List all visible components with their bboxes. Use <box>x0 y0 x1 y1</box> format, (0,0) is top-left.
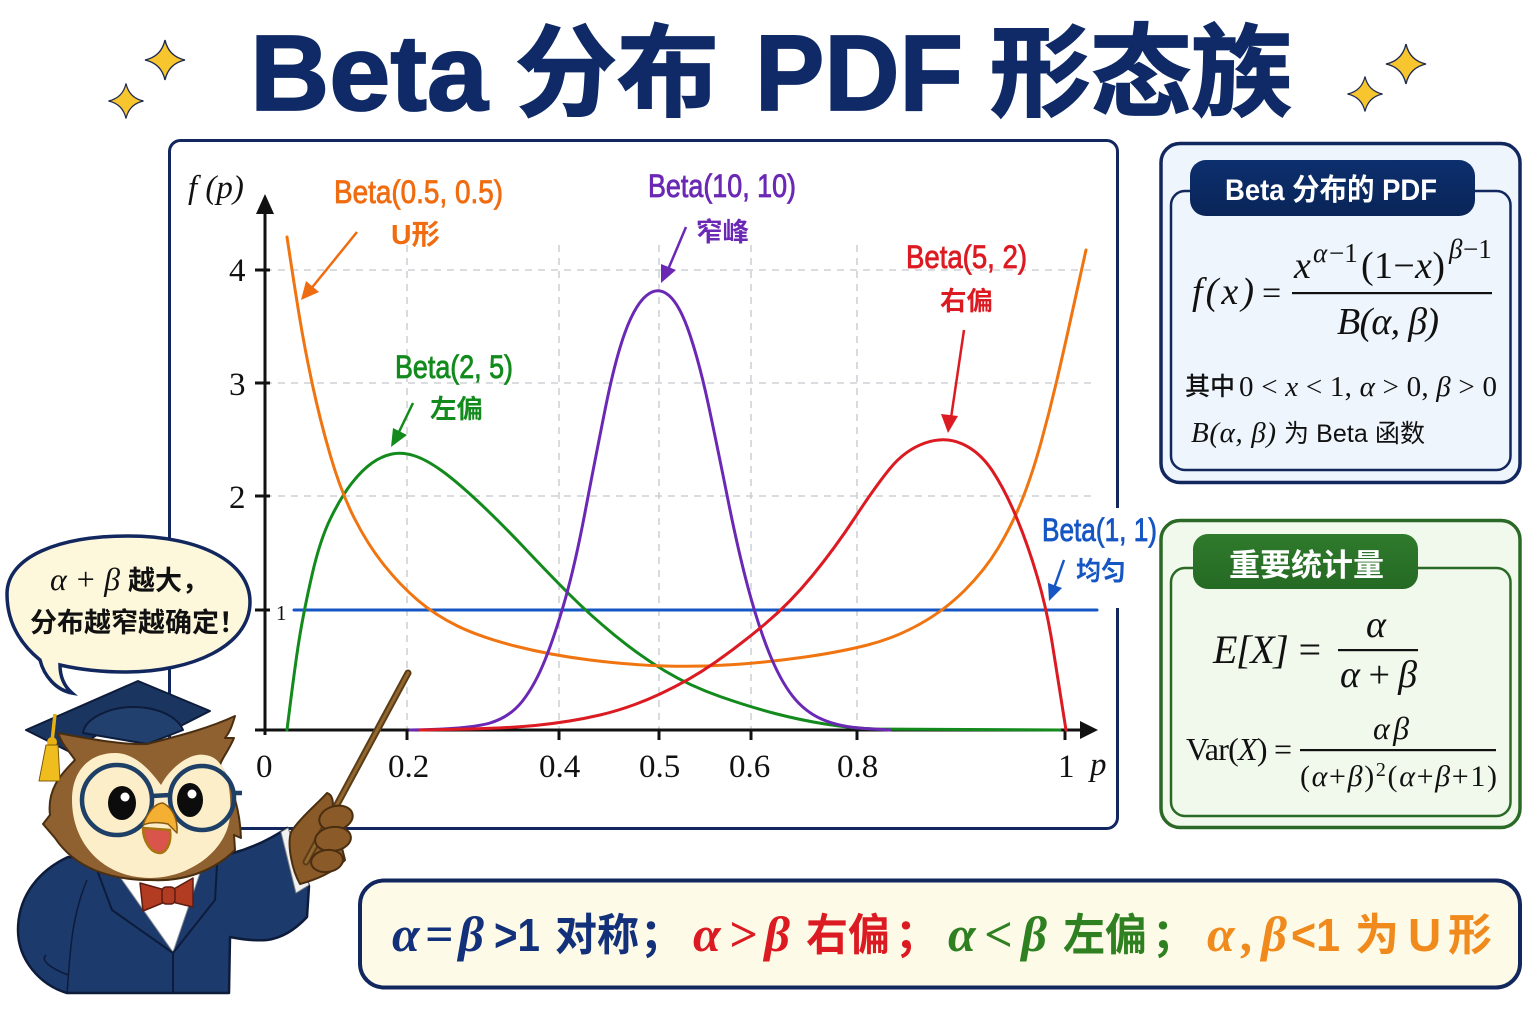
arrow: purple <box>661 227 686 283</box>
callout: speech bubble <box>7 536 250 693</box>
label: Beta(5,2) <box>906 239 1027 316</box>
formula: expectation <box>1212 604 1418 696</box>
axis labels: 0.5 <box>639 749 680 785</box>
owl ears and head <box>43 716 241 880</box>
label: Beta(1,1) <box>1042 508 1158 608</box>
hand palm <box>290 793 345 884</box>
arrow: green <box>391 403 413 447</box>
tassel <box>39 714 60 781</box>
formula: variance: α+β+1) <box>1399 760 1497 793</box>
panel background <box>1161 520 1520 828</box>
hand fingers <box>310 802 356 874</box>
title: 分布 <box>515 18 719 130</box>
axis labels: 0.4 <box>539 749 580 785</box>
rule: symmetric: >1 <box>494 909 540 961</box>
illustration: owl professor <box>18 673 408 993</box>
label: Beta(5,2): Beta(5, 2) <box>906 239 1027 275</box>
label: Beta(1,1): 均匀 <box>1076 556 1126 586</box>
axis labels: 0.6 <box>729 749 770 785</box>
title: Beta <box>250 12 489 133</box>
rule: right skew: 右偏 <box>806 911 890 960</box>
panel: Beta PDF formula <box>1161 144 1520 482</box>
header: 重要统计量 <box>1229 548 1384 583</box>
label: Beta(1,1): Beta(1, 1) <box>1042 512 1157 548</box>
title: 形态族 <box>990 18 1292 130</box>
formula: variance: αβ <box>1373 710 1409 746</box>
callout: speech bubble: 越大， <box>128 566 209 596</box>
eyes <box>108 783 203 820</box>
axis labels: 1 <box>276 601 286 625</box>
header <box>1190 160 1475 216</box>
axes <box>255 194 1098 740</box>
label: Beta(2,5): 左偏 <box>430 394 483 424</box>
note: Beta function <box>1191 417 1425 449</box>
rule: symmetric: ； <box>640 911 684 960</box>
axis labels <box>188 170 1106 785</box>
note: Beta function: 为 Beta 函数 <box>1284 420 1425 448</box>
note: domain: 0 < x < 1, α > 0, β > 0 <box>1239 371 1497 403</box>
cap <box>26 681 210 752</box>
formula: variance: (α+β) <box>1300 760 1374 793</box>
label: Beta(10,10): 窄峰 <box>696 217 749 247</box>
arrow: red <box>941 330 964 433</box>
axis labels: p <box>1088 747 1106 783</box>
arrow: orange <box>301 232 357 300</box>
rule: left skew: α<β <box>948 906 1047 962</box>
axis labels: 3 <box>229 367 246 403</box>
axis labels: 1 <box>1058 749 1074 785</box>
rule: symmetric: α=β <box>392 906 484 962</box>
formula: f(x): f(x) <box>1192 271 1254 313</box>
formula: f(x) <box>1192 234 1492 343</box>
curve: Beta(10,10) <box>410 291 890 730</box>
rule: left skew: ； <box>1152 911 1196 960</box>
formula: f(x): −1 <box>1329 238 1358 268</box>
formula: f(x): = <box>1262 275 1281 312</box>
beak <box>143 803 177 833</box>
formula: f(x): β <box>1448 234 1463 264</box>
bow tie <box>140 878 193 911</box>
title <box>250 12 1292 133</box>
rule: U shape: U <box>1408 909 1441 961</box>
panel: key statistics <box>1161 520 1520 828</box>
formula: variance <box>1186 710 1497 793</box>
label: Beta(0.5,0.5): Beta(0.5, 0.5) <box>334 174 503 210</box>
icon: right sparkles <box>1348 44 1426 112</box>
formula: f(x): −1 <box>1463 234 1492 264</box>
formula: f(x): (1−x) <box>1361 245 1445 287</box>
rule: U shape: 形 <box>1448 911 1492 960</box>
label: Beta(2,5): Beta(2, 5) <box>395 349 513 385</box>
rule: right skew <box>693 906 939 962</box>
axis labels: 4 <box>229 253 246 289</box>
header <box>1193 534 1418 589</box>
rule: symmetric <box>392 906 684 962</box>
formula: variance: ( <box>1388 760 1398 793</box>
panel: chart <box>170 140 1118 828</box>
label: Beta(10,10): Beta(10, 10) <box>648 168 796 204</box>
callout: speech bubble: 分布越窄越确定！ <box>30 607 246 638</box>
formula: expectation: α+β <box>1340 654 1417 696</box>
note: Beta function: B(α, β) <box>1191 417 1276 449</box>
axis labels: 2 <box>229 480 246 516</box>
shirt cuff <box>281 828 309 893</box>
rule: U shape: <1 <box>1291 909 1340 961</box>
label: Beta(0.5,0.5): U形 <box>391 219 440 250</box>
axis labels: 0.8 <box>837 749 878 785</box>
curve: Beta(0.5,0.5) <box>287 237 1086 666</box>
rule: symmetric: 对称 <box>555 911 639 960</box>
header: Beta 分布的 PDF <box>1225 174 1437 207</box>
axis labels: 0.2 <box>388 749 429 785</box>
axis labels: 0 <box>256 749 272 785</box>
chart frame <box>170 140 1118 828</box>
rule: right skew: α>β <box>693 906 790 962</box>
owl body and jacket <box>18 828 309 993</box>
shirt <box>120 873 200 952</box>
label: Beta(0.5,0.5) <box>334 174 503 250</box>
curve: Beta(1,1) uniform <box>294 608 1097 612</box>
owl face <box>72 753 230 878</box>
rule: right skew: ； <box>895 911 939 960</box>
label: Beta(5,2): 右偏 <box>940 286 993 316</box>
label: Beta(10,10) <box>648 168 796 247</box>
curve: Beta(2,5) <box>287 453 1060 730</box>
rule: left skew: 左偏 <box>1063 911 1147 960</box>
formula: f(x): B(α, β) <box>1337 301 1439 343</box>
rule: U shape: α,β <box>1207 906 1287 962</box>
callout: speech bubble: α + β <box>50 561 120 597</box>
rule: U shape <box>1207 906 1492 962</box>
jacket shading <box>44 880 87 993</box>
label: Beta(2,5) <box>395 349 513 424</box>
pointer stick <box>306 673 408 862</box>
formula: variance: Var(X) = <box>1186 731 1292 767</box>
glasses <box>82 765 242 835</box>
arrow: blue <box>1048 560 1064 601</box>
panel: rule summary <box>360 880 1520 988</box>
formula: f(x): α <box>1313 238 1328 268</box>
axis labels: f (p) <box>188 170 244 206</box>
formula: expectation: E[X] = <box>1212 627 1323 672</box>
curve: Beta(5,2) <box>420 440 1066 730</box>
icon: left sparkles <box>108 40 185 118</box>
title: PDF <box>755 12 963 133</box>
rule: left skew <box>948 906 1196 962</box>
note: domain: 其中 <box>1185 373 1235 401</box>
mouth <box>143 828 170 853</box>
summary box <box>360 880 1520 988</box>
formula: expectation: α <box>1366 604 1387 646</box>
panel background <box>1161 144 1520 482</box>
rule: U shape: 为 <box>1355 911 1399 960</box>
formula: variance: 2 <box>1376 759 1386 781</box>
formula: f(x): x <box>1293 245 1311 287</box>
lapels <box>97 865 217 993</box>
